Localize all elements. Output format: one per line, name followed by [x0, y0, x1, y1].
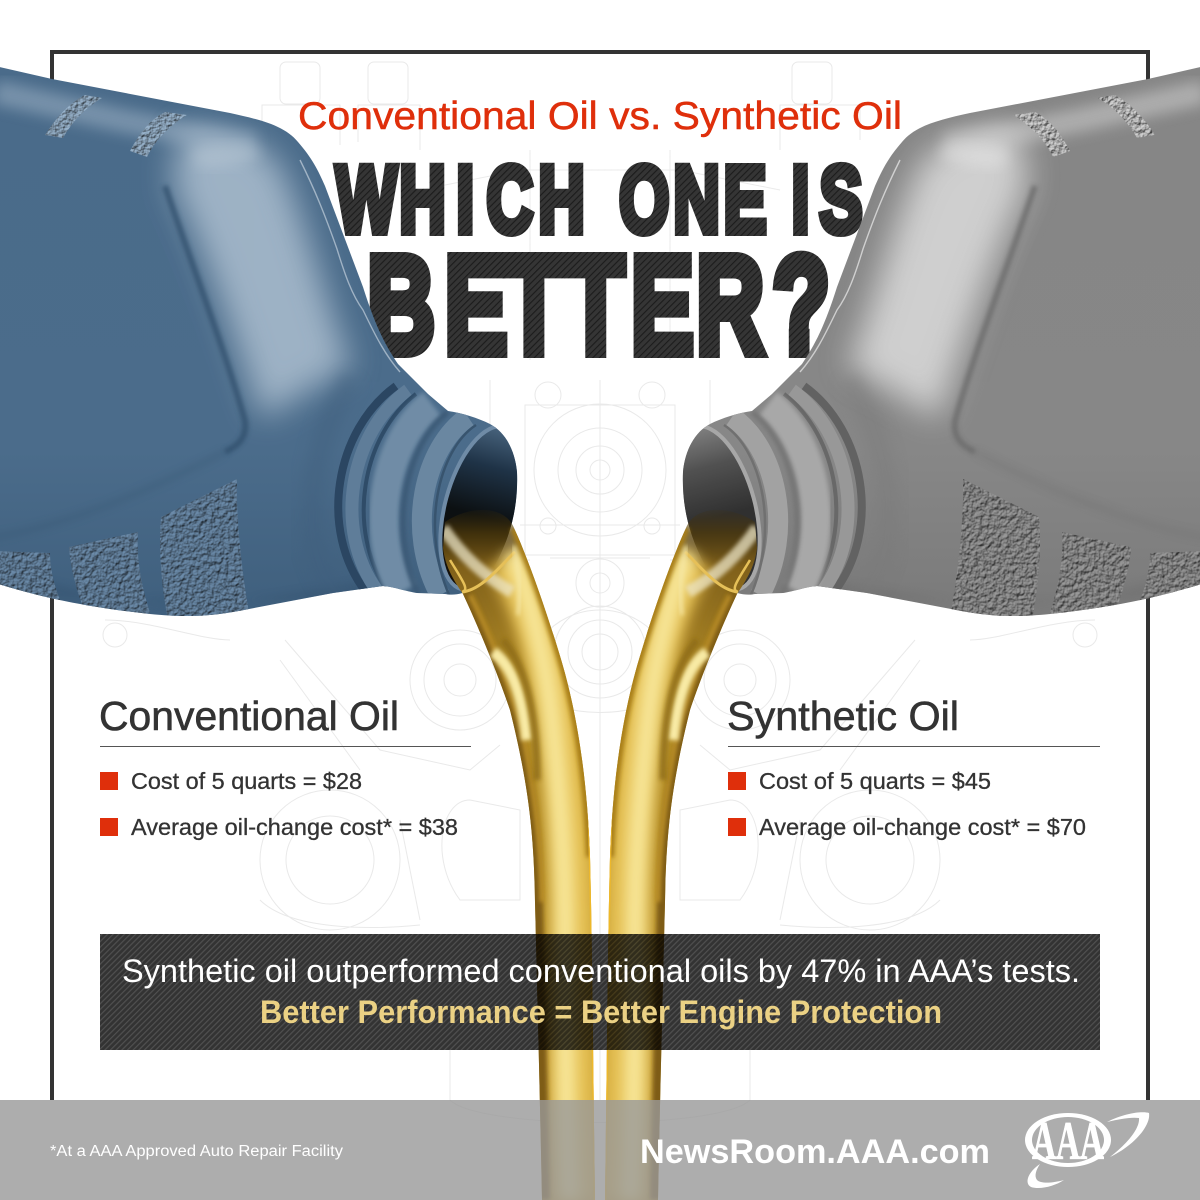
synthetic oil stream — [605, 510, 757, 1200]
bullet: cost of 5 quarts: Cost of 5 quarts = $28 — [131, 768, 362, 794]
bullet: average oil-change cost: Average oil-change cost* = $70 — [759, 814, 1086, 840]
engine blueprint backdrop — [103, 62, 1097, 1122]
panel: synthetic oil — [727, 693, 1100, 840]
bullet: average oil-change cost: Average oil-change cost* = $38 — [131, 814, 458, 840]
blue conventional oil bottle — [0, 66, 541, 622]
bullet: cost of 5 quarts: Cost of 5 quarts = $45 — [759, 768, 991, 794]
headline: WHICH ONE IS — [336, 147, 862, 253]
panel: conventional oil — [99, 693, 471, 840]
AAA logo: AAA — [1032, 1111, 1104, 1171]
conventional oil stream — [443, 510, 595, 1200]
callout text: Better Performance = Better Engine Protection — [260, 994, 942, 1030]
heading: synthetic oil: Synthetic Oil — [727, 693, 959, 739]
footnote: *At a AAA Approved Auto Repair Facility — [50, 1143, 343, 1160]
outer frame — [52, 52, 1148, 1100]
gray synthetic oil bottle — [659, 66, 1200, 622]
heading: conventional oil: Conventional Oil — [99, 693, 399, 739]
callout text: Synthetic oil outperformed conventional oils by 47% in AAA’s tests. — [122, 953, 1080, 989]
headline stripe texture — [325, 150, 875, 365]
headline: BETTER? — [367, 229, 830, 383]
callout text — [122, 953, 1080, 1030]
title: conventional vs synthetic: Conventional Oil vs. Synthetic Oil — [298, 95, 902, 138]
footer band — [0, 1100, 1200, 1200]
callout bar background — [100, 934, 1100, 1050]
headline — [336, 147, 862, 383]
website url: NewsRoom.AAA.com — [640, 1133, 990, 1171]
